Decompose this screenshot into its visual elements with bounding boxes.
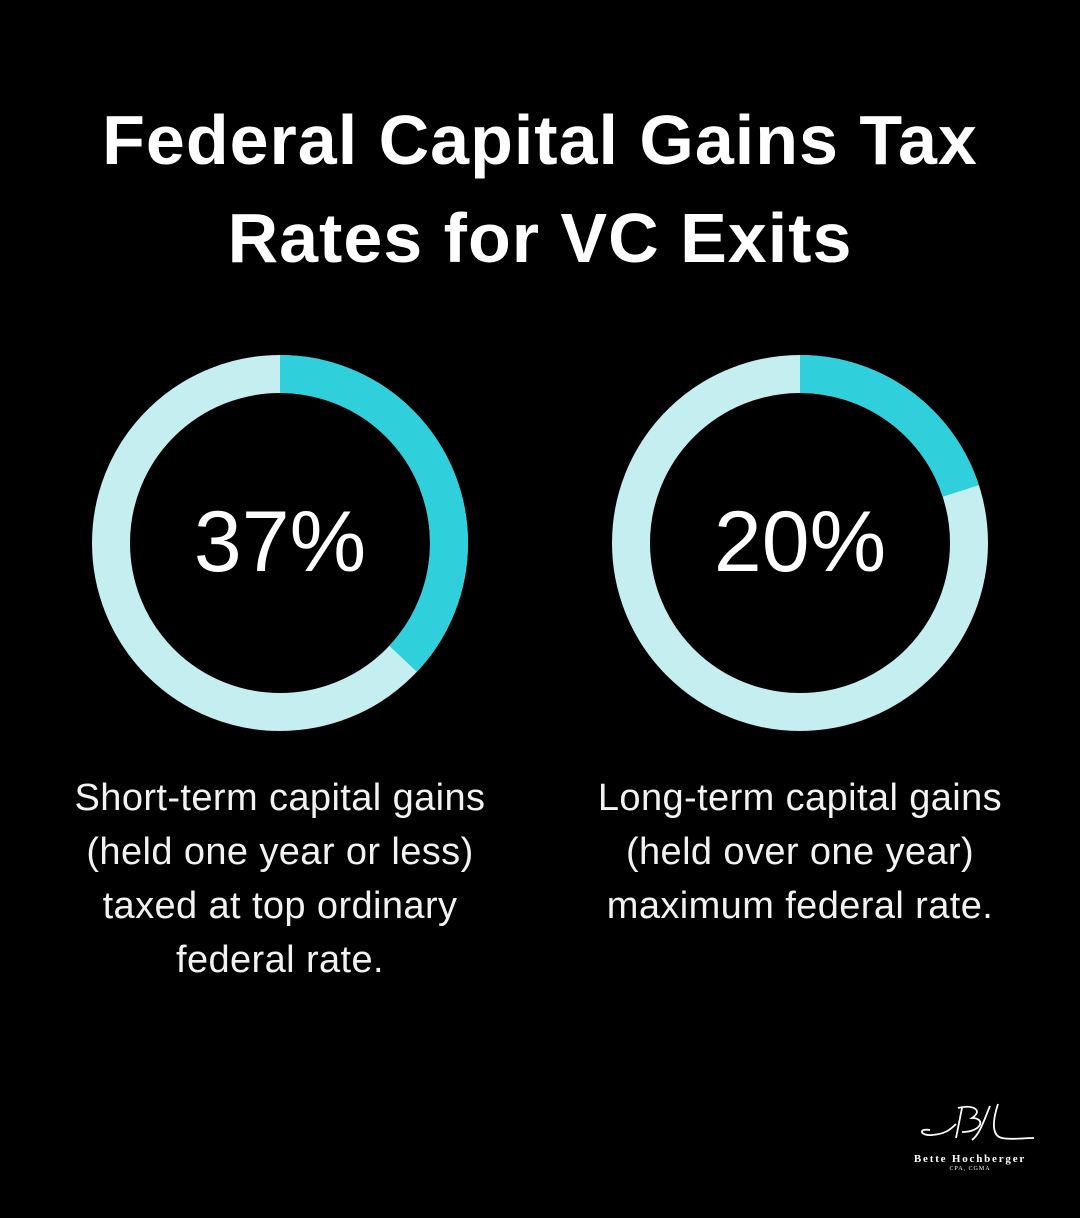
logo: Bette Hochberger — [914, 1153, 1026, 1165]
donut chart: 37% — [92, 355, 468, 731]
caption: short-term: Short-term capital gains — [75, 777, 485, 819]
caption: short-term — [75, 777, 485, 981]
donut chart: 20% — [612, 355, 988, 731]
caption: short-term: (held one year or less) — [86, 831, 474, 873]
logo: CPA, CGMA — [949, 1166, 991, 1172]
title — [102, 101, 978, 277]
caption: long-term: Long-term capital gains — [598, 777, 1002, 819]
percentage: 20%: 20% — [714, 494, 886, 590]
logo — [914, 1104, 1034, 1172]
title: Rates for VC Exits — [228, 199, 852, 277]
caption: short-term: federal rate. — [176, 939, 384, 981]
caption: long-term: maximum federal rate. — [607, 885, 993, 927]
percentage: 37%: 37% — [194, 494, 366, 590]
caption: long-term — [598, 777, 1002, 927]
title: Federal Capital Gains Tax — [102, 101, 978, 179]
caption: long-term: (held over one year) — [626, 831, 974, 873]
caption: short-term: taxed at top ordinary — [103, 885, 457, 927]
